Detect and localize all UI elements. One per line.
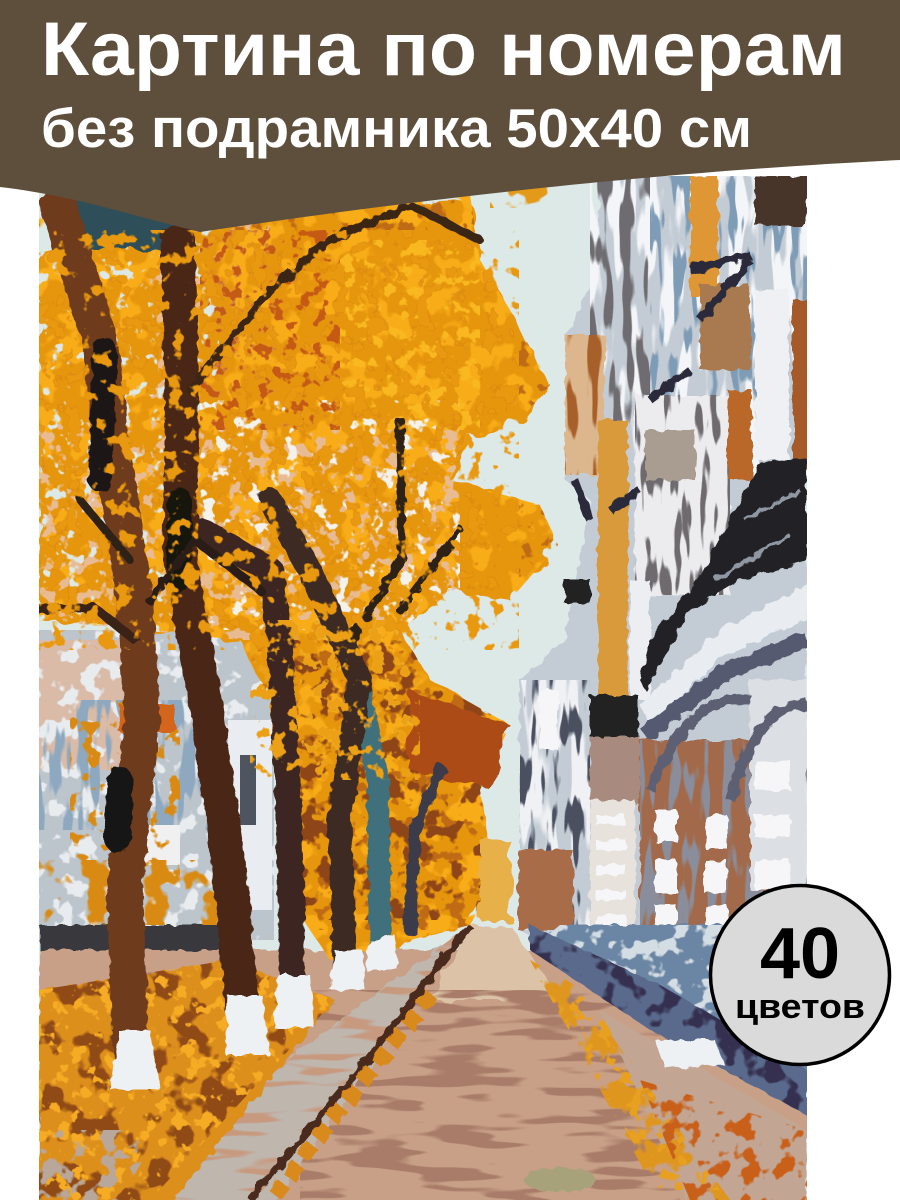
foliage over trunks: [39, 230, 519, 780]
white window details: [540, 690, 790, 939]
badge label: цветов: [735, 988, 865, 1026]
badge: 40 colours: [710, 886, 890, 1064]
header banner: [0, 0, 900, 232]
trunks: [39, 205, 480, 1050]
ground leaves: [250, 925, 470, 1200]
foliage base: [39, 180, 560, 960]
right buildings: [516, 176, 807, 936]
balcony: [565, 255, 807, 800]
painting: autumn street: [39, 176, 809, 1200]
subtitle: без подрамника 50х40 см: [41, 97, 752, 159]
sky: [39, 176, 807, 1200]
title: Картина по номерам: [41, 7, 846, 92]
white tree bases: [110, 935, 398, 1090]
ground: [39, 925, 807, 1200]
badge number: 40: [760, 914, 840, 994]
left buildings: [39, 630, 274, 1025]
